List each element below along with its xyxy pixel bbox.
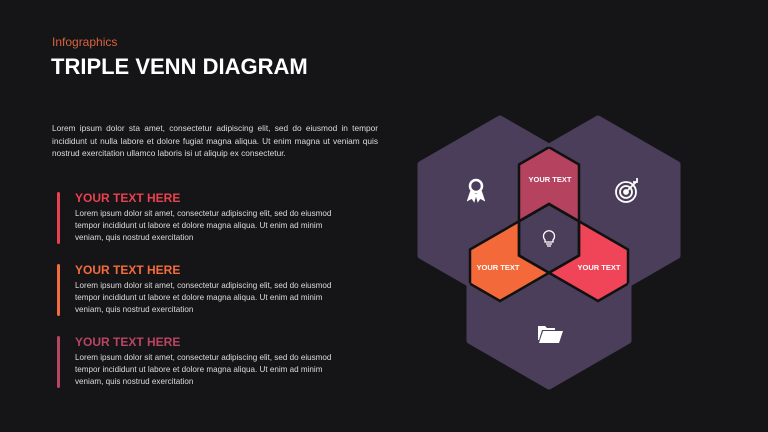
lens labels: YOUR TEXT [529, 175, 572, 184]
item 3: YOUR TEXT HERE [75, 335, 180, 349]
item 1 [57, 191, 331, 244]
title: TRIPLE VENN DIAGRAM [51, 54, 308, 79]
icon: lightbulb [544, 231, 554, 246]
subtitle: Infographics [52, 35, 117, 49]
center region [520, 206, 578, 272]
left lens [471, 224, 546, 300]
icon: folder [538, 326, 563, 343]
icon: award [468, 180, 484, 201]
intro paragraph: Lorem ipsum dolor sta amet, consectetur adipiscing elit, sed do eiusmod in tempor incididunt ut nulla labore et dolore fugiat magna aliqua. Ut enim magna ut veniam quis nostrud exercitation ullamco laboris isi ut aliquip ex consectetur. [52, 123, 378, 158]
item 2: Lorem ipsum dolor sit amet, consectetur adipiscing elit, sed do eiusmod tempor incididunt ut labore et dolore magna aliqua. Ut enim ad minim veniam, quis nostrud exercitation [75, 281, 331, 314]
item 2 [57, 263, 331, 316]
lens labels [477, 175, 621, 272]
venn diagram [418, 116, 680, 390]
icon: target [616, 178, 637, 202]
item 1: Lorem ipsum dolor sit amet, consectetur adipiscing elit, sed do eiusmod tempor incididunt ut labore et dolore magna aliqua. Ut enim ad minim veniam, quis nostrud exercitation [75, 209, 331, 242]
item 1: YOUR TEXT HERE [75, 191, 180, 205]
lens labels: YOUR TEXT [578, 263, 621, 272]
top lens [520, 148, 578, 219]
item 3: Lorem ipsum dolor sit amet, consectetur adipiscing elit, sed do eiusmod tempor incididunt ut labore et dolore magna aliqua. Ut enim ad minim veniam, quis nostrud exercitation [75, 353, 331, 386]
item 2: YOUR TEXT HERE [75, 263, 180, 277]
right lens [552, 224, 627, 300]
lens labels: YOUR TEXT [477, 263, 520, 272]
item 3 [57, 335, 331, 388]
